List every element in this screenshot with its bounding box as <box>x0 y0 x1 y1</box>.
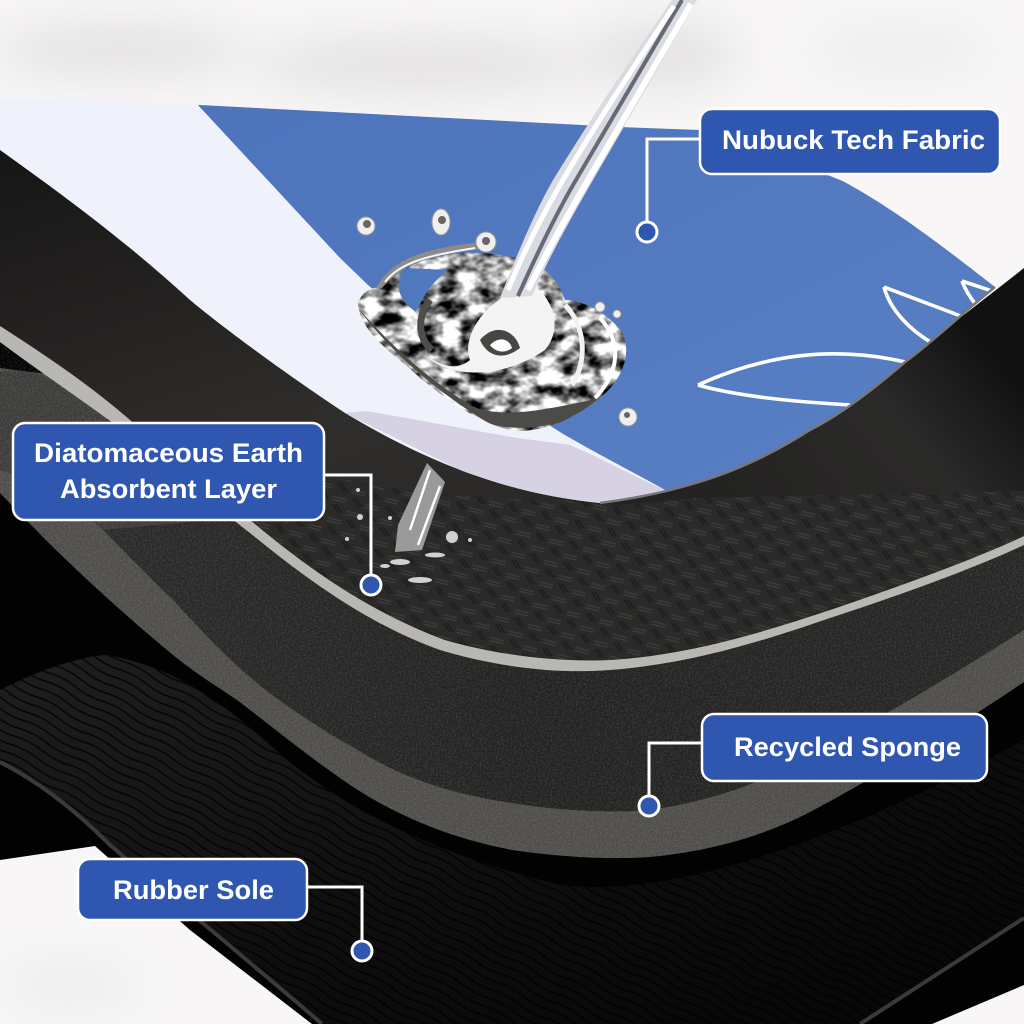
callout: Diatomaceous Earth Absorbent Layer <box>13 423 381 595</box>
diatom patterned surface <box>255 470 1024 660</box>
splash body <box>358 252 626 431</box>
sponge side edge band <box>0 368 1024 858</box>
callout: Diatomaceous Earth Absorbent Layer: Absorbent Layer <box>60 474 277 504</box>
layer: rubber sole underside <box>0 340 1024 1024</box>
callout: Recycled Sponge <box>639 714 987 816</box>
water splash puddle <box>350 209 640 440</box>
fabric blue panel <box>198 104 995 490</box>
sponge lit left end <box>0 370 210 530</box>
sponge top surface <box>20 372 1024 811</box>
callout: Recycled Sponge: Recycled Sponge <box>734 732 961 762</box>
water stream pouring <box>500 0 697 298</box>
callout: Nubuck Tech Fabric: Nubuck Tech Fabric <box>722 125 985 155</box>
rubber sole textured surface <box>0 655 1024 1024</box>
layer: nubuck fabric <box>0 97 1024 520</box>
diatom pale edge <box>0 140 1024 671</box>
layer: diatomaceous earth absorbent <box>0 140 1024 671</box>
water drip through layers <box>345 463 472 583</box>
splash rope arc <box>378 246 478 292</box>
leaf outlines <box>698 281 995 405</box>
callout: Diatomaceous Earth Absorbent Layer: Diatomaceous Earth <box>34 438 303 468</box>
callout: Rubber Sole: Rubber Sole <box>113 875 274 905</box>
diatom back surface <box>0 140 1024 660</box>
fabric lavender fold shadow <box>345 411 665 510</box>
droplets <box>357 209 637 426</box>
callout: Rubber Sole <box>78 859 372 961</box>
callout: Nubuck Tech Fabric <box>637 109 1000 242</box>
layer: recycled sponge <box>0 340 1024 858</box>
layer: right foam wedge <box>560 268 1024 505</box>
